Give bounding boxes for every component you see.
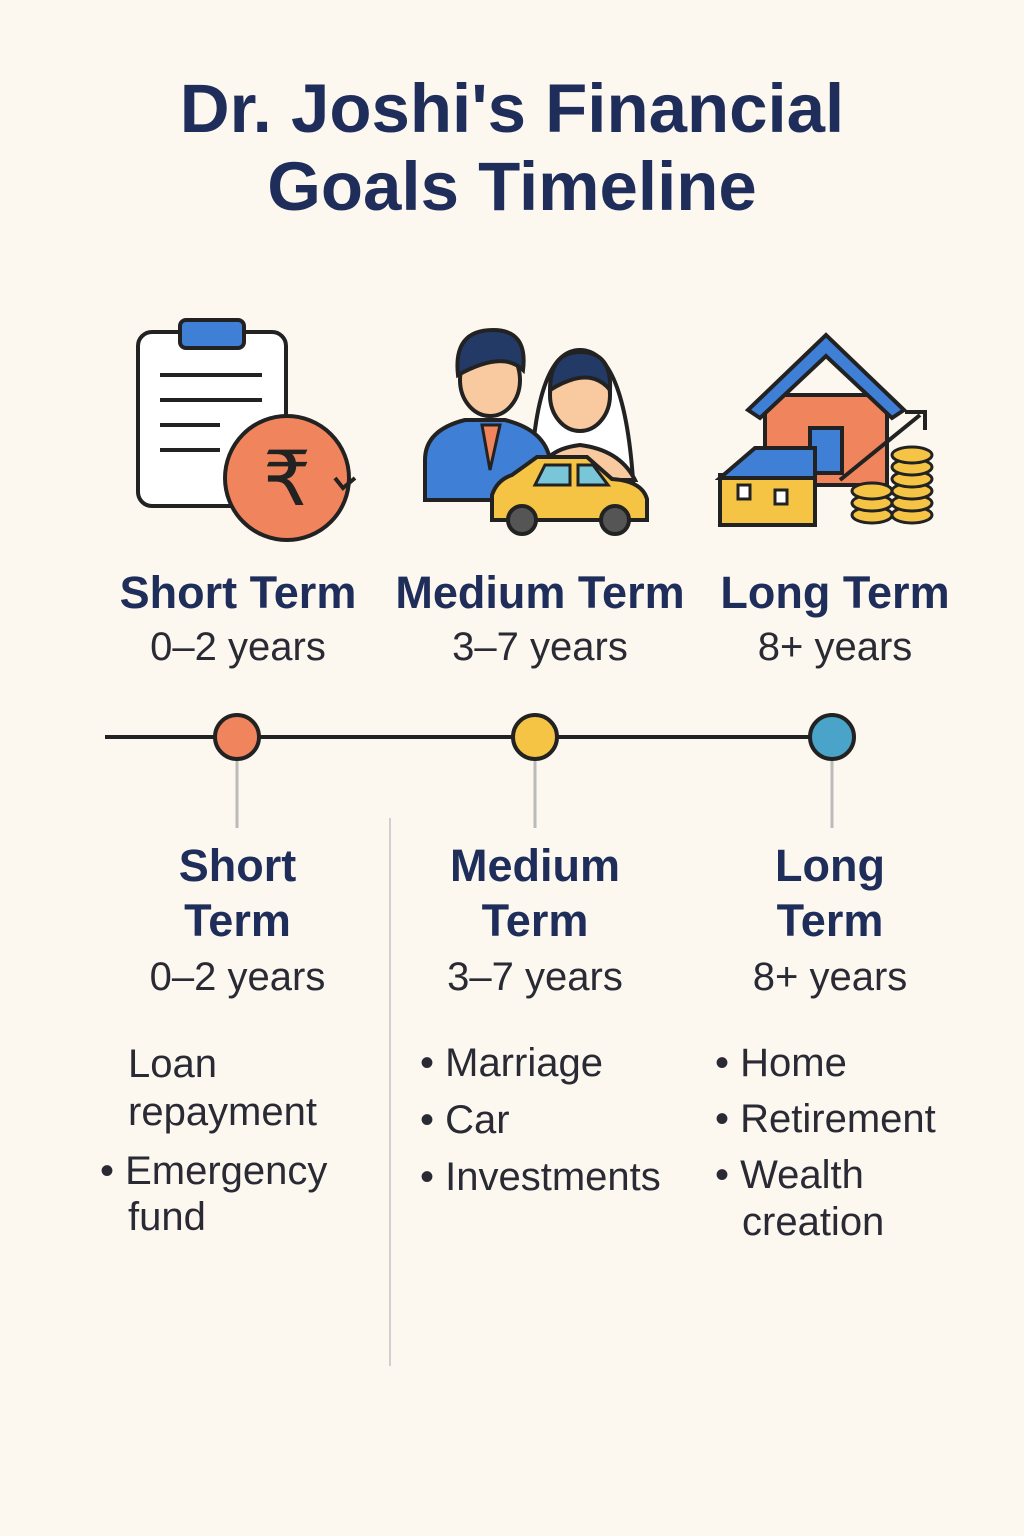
column: medium term: • Marriage [420, 1041, 603, 1085]
column: medium term: Medium [450, 840, 620, 891]
column: medium term: 3–7 years [447, 955, 623, 999]
label: short term top: 0–2 years [150, 625, 326, 669]
label: medium term top: Medium Term [395, 567, 685, 618]
title: Dr. Joshi's Financial [180, 70, 844, 147]
column: short term: Short [179, 840, 296, 891]
column: short term: • Emergency [100, 1149, 327, 1193]
column: long term: Term [777, 895, 883, 946]
label: long term top: Long Term [720, 567, 950, 618]
column: long term: • Wealth [715, 1153, 864, 1197]
column: short term: fund [128, 1195, 206, 1239]
column: medium term [420, 840, 661, 1199]
column: long term: • Retirement [715, 1097, 936, 1141]
title [180, 70, 844, 225]
column: short term: Term [184, 895, 291, 946]
column: long term: creation [742, 1200, 884, 1244]
title: Goals Timeline [267, 148, 757, 225]
icon: clipboard with rupee [136, 318, 356, 542]
icon: clipboard with rupee: ₹ [263, 434, 311, 523]
column: short term: Loan [128, 1042, 217, 1086]
label: short term top: Short Term [120, 567, 356, 618]
column: short term: repayment [128, 1090, 317, 1134]
column: short term: 0–2 years [150, 955, 325, 999]
column: long term [715, 840, 936, 1244]
column: long term: 8+ years [753, 955, 907, 999]
column: medium term: • Car [420, 1098, 510, 1142]
column: medium term: Term [482, 895, 588, 946]
label: medium term top: 3–7 years [452, 625, 628, 669]
timeline [105, 713, 856, 828]
label: short term top [120, 567, 356, 669]
column: long term: • Home [715, 1041, 847, 1085]
icon: couple with car [423, 328, 649, 536]
column: medium term: • Investments [420, 1155, 661, 1199]
label: long term top [720, 567, 950, 669]
column: short term [100, 840, 328, 1239]
column: long term: Long [775, 840, 885, 891]
label: medium term top [395, 567, 685, 669]
label: long term top: 8+ years [758, 625, 912, 669]
icon: houses with coins [715, 332, 934, 527]
